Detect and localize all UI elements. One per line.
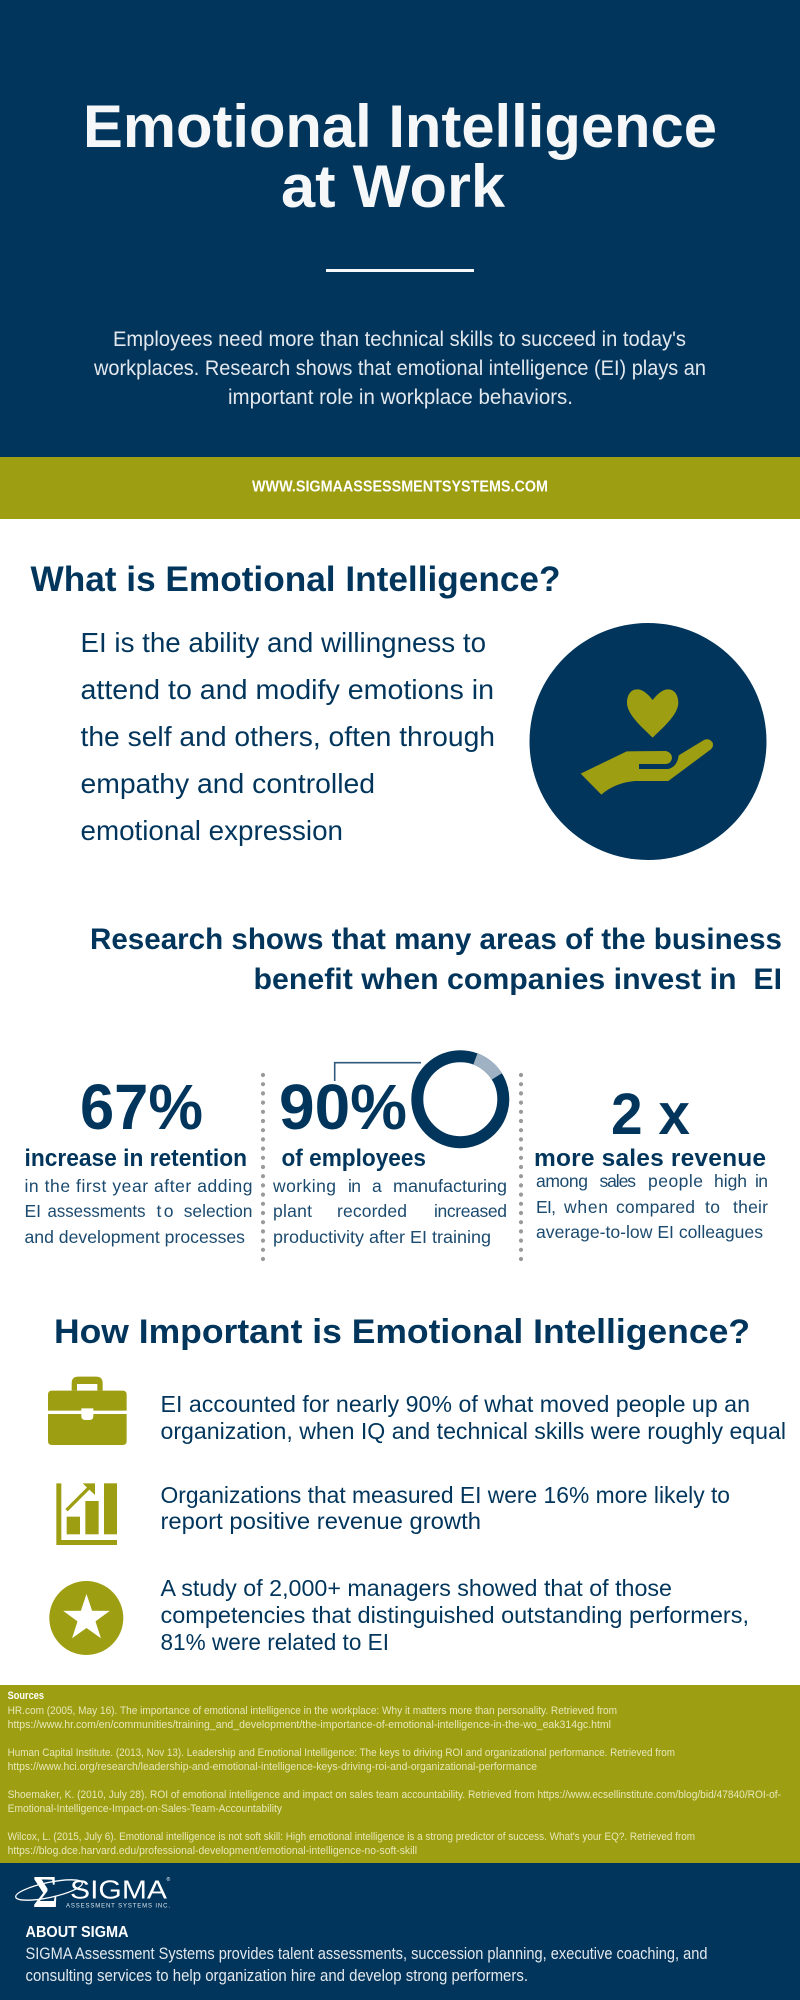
text: managers study: A study of 2,000+ managers showed that of those xyxy=(160,1575,672,1601)
stat: 90% of employees: manufacturing xyxy=(393,1176,507,1196)
logo: sigma: Σ xyxy=(33,1866,58,1917)
heading: what is emotional intelligence: What is Emotional Intelligence? xyxy=(30,560,560,599)
stat: 67% retention: in the first year after adding xyxy=(24,1176,252,1196)
stat: 90% of employees: plant xyxy=(273,1201,312,1221)
intro text xyxy=(93,328,706,409)
stat: 2x sales revenue: compared xyxy=(616,1197,695,1217)
stat: 67% retention: selection xyxy=(184,1201,252,1221)
panel: sources: Wilcox, L. (2015, July 6). Emotional intelligence is not soft skill: High emotional intelligence is a strong predictor of success. What's your EQ?. Retrieved from xyxy=(8,1831,695,1843)
panel: header xyxy=(0,0,800,457)
title: Emotional Intelligence xyxy=(83,93,717,160)
stat: 2x sales revenue: EI, xyxy=(536,1197,556,1217)
stat: 67% retention: to xyxy=(156,1201,174,1221)
stat: 67% retention: EI xyxy=(24,1201,41,1221)
panel: about sigma xyxy=(0,1863,800,2000)
stat: 90% of employees: of employees xyxy=(282,1145,426,1172)
about text: SIGMA Assessment Systems provides talent assessments, succession planning, executive coaching, and xyxy=(26,1945,708,1963)
panel: sources xyxy=(0,1685,800,1863)
about heading: ABOUT SIGMA xyxy=(26,1924,128,1941)
definition text: EI is the ability and willingness to xyxy=(80,627,486,658)
text: career advancement xyxy=(160,1391,786,1444)
text: revenue growth xyxy=(160,1482,730,1534)
stat: 67% retention: increase in retention xyxy=(24,1145,247,1172)
panel: sources: HR.com (2005, May 16). The importance of emotional intelligence in the workplace: Why it matters more than personality. Retrieved from xyxy=(8,1705,617,1717)
text: revenue growth: Organizations that measured EI were 16% more likely to xyxy=(160,1482,730,1508)
stat: 2x sales revenue: sales xyxy=(600,1171,636,1191)
logo: sigma xyxy=(14,1866,171,1917)
stat: 67% retention xyxy=(24,1071,252,1247)
icon: star badge xyxy=(49,1581,123,1655)
stat: 2x sales revenue: 2 x xyxy=(611,1082,690,1147)
logo: sigma: SIGMA xyxy=(70,1876,167,1904)
stat: 2x sales revenue: more sales revenue xyxy=(534,1145,766,1172)
definition text: emotional expression xyxy=(80,815,343,846)
panel: sources: https://www.hr.com/en/communities/training_and_development/the-importance-of-emotional-intelligence-in-the-wo_eak314gc.html xyxy=(8,1719,611,1731)
icon: briefcase xyxy=(48,1377,127,1445)
stat: 67% retention: and development processes xyxy=(24,1227,245,1247)
text: managers study: 81% were related to EI xyxy=(160,1629,389,1655)
about text: consulting services to help organization hire and develop strong performers. xyxy=(26,1967,528,1985)
definition text: empathy and controlled xyxy=(80,768,375,799)
intro text: important role in workplace behaviors. xyxy=(228,386,573,409)
text: career advancement: organization, when IQ and technical skills were roughly equal xyxy=(160,1418,786,1444)
donut chart: 90 percent xyxy=(417,1056,503,1142)
heading: research shows: benefit when companies invest in EI xyxy=(254,963,782,996)
stat: 2x sales revenue xyxy=(534,1082,768,1242)
intro text: workplaces. Research shows that emotional intelligence (EI) plays an xyxy=(93,357,706,380)
panel: sources: Sources xyxy=(8,1690,44,1702)
text: managers study: competencies that distinguished outstanding performers, xyxy=(160,1602,749,1628)
stat: 90% of employees: increased xyxy=(434,1201,507,1221)
text: career advancement: EI accounted for nearly 90% of what moved people up an xyxy=(160,1391,750,1417)
stat: 2x sales revenue: high xyxy=(714,1171,747,1191)
stat: 90% of employees: working xyxy=(272,1176,336,1196)
stat: 2x sales revenue: people xyxy=(648,1171,703,1191)
stat: 90% of employees: a xyxy=(372,1176,382,1196)
panel: sources: Human Capital Institute. (2013, Nov 13). Leadership and Emotional Intelligence: The keys to driving ROI and organizational performance. Retrieved from xyxy=(8,1747,675,1759)
text: revenue growth: report positive revenue growth xyxy=(160,1508,481,1534)
heading: research shows xyxy=(90,923,782,996)
stat: 2x sales revenue: in xyxy=(755,1171,768,1191)
title: at Work xyxy=(281,153,506,220)
stat: 2x sales revenue: average-to-low EI colleagues xyxy=(536,1222,763,1242)
logo: sigma: ASSESSMENT SYSTEMS INC. xyxy=(66,1904,170,1910)
stat: 67% retention: assessments xyxy=(48,1201,146,1221)
website banner xyxy=(0,457,800,519)
intro text: Employees need more than technical skills to succeed in today's xyxy=(113,328,686,351)
definition text: the self and others, often through xyxy=(80,721,495,752)
website banner: WWW.SIGMAASSESSMENTSYSTEMS.COM xyxy=(252,478,548,496)
icon: heart in hand xyxy=(530,623,766,860)
stat: 2x sales revenue: when xyxy=(563,1197,608,1217)
stat: 90% of employees: 90% xyxy=(279,1071,407,1143)
stat: 2x sales revenue: their xyxy=(733,1197,768,1217)
stat: 2x sales revenue: to xyxy=(705,1197,720,1217)
stat: 90% of employees: in xyxy=(348,1176,361,1196)
stat: 67% retention: 67% xyxy=(80,1071,203,1143)
heading: research shows: Research shows that many areas of the business xyxy=(90,923,782,956)
panel: sources: Emotional-Intelligence-Impact-on-Sales-Team-Accountability xyxy=(8,1803,282,1815)
stat: 2x sales revenue: among xyxy=(536,1171,588,1191)
definition text: attend to and modify emotions in xyxy=(80,674,494,705)
title underline xyxy=(326,269,474,272)
definition text xyxy=(80,627,495,846)
connector line xyxy=(335,1063,421,1081)
about text xyxy=(26,1945,708,1985)
panel: sources: https://www.hci.org/research/leadership-and-emotional-intelligence-keys-driving-roi-and-organizational-performance xyxy=(8,1761,537,1773)
heading: how important: How Important is Emotional Intelligence? xyxy=(54,1313,750,1351)
stat: 90% of employees: productivity after EI training xyxy=(273,1227,491,1247)
panel: sources: https://blog.dce.harvard.edu/professional-development/emotional-intelligence-no-soft-skill xyxy=(8,1845,417,1857)
icon: growth chart xyxy=(56,1483,117,1545)
title xyxy=(83,93,717,220)
text: managers study xyxy=(160,1575,749,1655)
stat: 90% of employees: recorded xyxy=(337,1201,407,1221)
logo: sigma: ® xyxy=(166,1876,170,1883)
stat: 90% of employees xyxy=(272,1056,507,1247)
